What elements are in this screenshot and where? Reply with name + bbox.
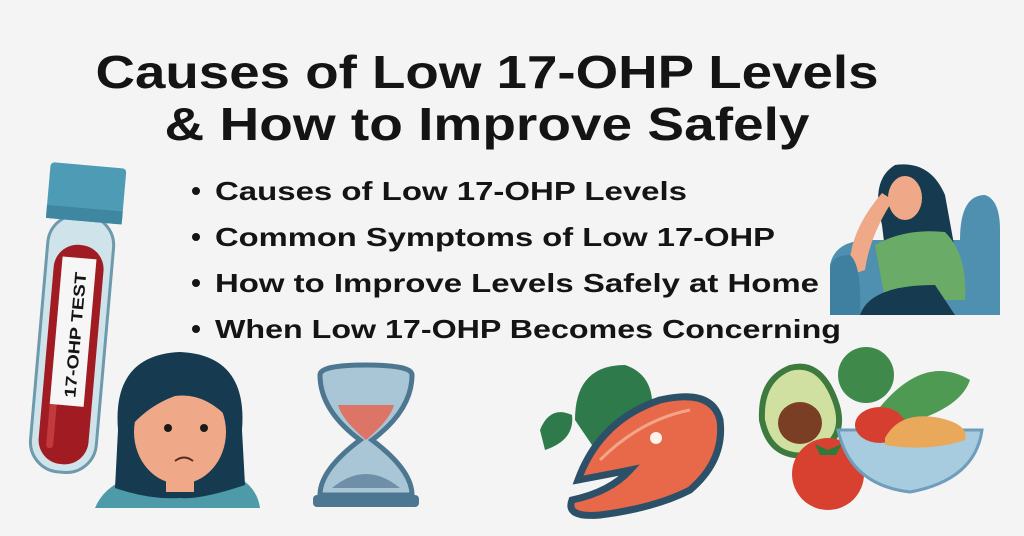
title: & How to Improve Safely [164, 98, 810, 150]
bullet list [192, 176, 841, 344]
icon: avocado, tomato and salad bowl [762, 347, 982, 510]
bullet list: Common Symptoms of Low 17-OHP [215, 222, 775, 252]
title [96, 46, 878, 150]
icon: blood test tube [24, 162, 127, 476]
bullet list: Causes of Low 17-OHP Levels [215, 176, 687, 206]
label: 17-OHP TEST [50, 256, 96, 407]
icon: worried woman [95, 352, 260, 508]
title: Causes of Low 17-OHP Levels [96, 46, 878, 98]
bullet list: How to Improve Levels Safely at Home [215, 268, 819, 298]
icon: tired woman in armchair [830, 164, 1000, 315]
label: 17-OHP TEST: 17-OHP TEST [62, 271, 90, 398]
bullet list: When Low 17-OHP Becomes Concerning [215, 314, 841, 344]
icon: hourglass [313, 365, 419, 507]
icon: spinach and salmon [540, 365, 721, 515]
